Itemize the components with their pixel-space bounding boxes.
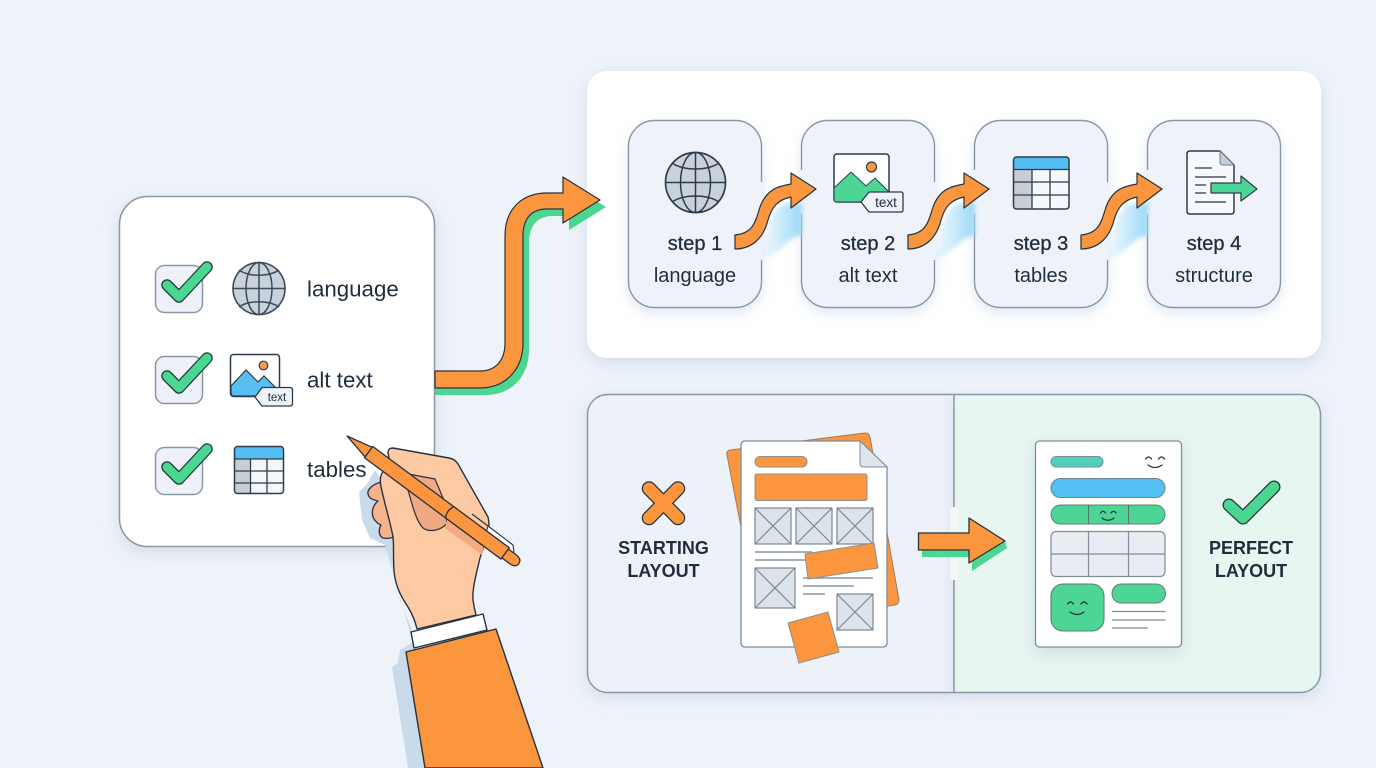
icon: globe (666, 152, 726, 212)
icon: green check (1229, 487, 1274, 518)
checkbox: alt text (156, 356, 207, 404)
label: perfect layout: PERFECT (1209, 538, 1293, 558)
step card 4 (1148, 120, 1280, 308)
icon: orange cross (649, 488, 678, 518)
pen (343, 430, 523, 569)
step card 3 (974, 120, 1108, 308)
sleeve (406, 629, 543, 768)
label: alt text: alt text (307, 368, 373, 392)
icon: image with alt text tag (834, 154, 903, 212)
text: alt text: alt text (839, 265, 898, 287)
arrow: step 3 to step 4 (1081, 170, 1162, 260)
text: structure: structure (1175, 265, 1253, 287)
pen shadow (445, 519, 484, 555)
text: language: language (654, 265, 736, 287)
text: step 1: step 1 (668, 233, 722, 255)
arrow: step 1 to step 2 (735, 170, 816, 260)
text: step 2: step 2 (841, 233, 895, 255)
label: perfect layout: LAYOUT (1215, 561, 1287, 581)
clip line over hand (472, 514, 488, 526)
label: starting layout: STARTING (618, 538, 709, 558)
label: language: language (307, 276, 399, 302)
cuff (411, 614, 487, 648)
icon: globe (233, 262, 285, 314)
step card 1 (628, 120, 762, 308)
palm and thumb (380, 448, 489, 629)
arrow: checklist to steps (435, 177, 606, 395)
panel: four steps (587, 71, 1321, 358)
icon: image with alt text tag: text (268, 392, 287, 404)
label: starting layout: LAYOUT (627, 561, 700, 581)
checkbox: language (156, 266, 207, 312)
illustration: tidy document (1036, 441, 1182, 647)
text: tables: tables (1014, 265, 1068, 287)
pen clip (484, 526, 514, 556)
hand shadow (359, 470, 430, 768)
icon: image with alt text tag (230, 354, 292, 406)
fingers (368, 482, 395, 538)
icon: document with arrow (1187, 151, 1257, 214)
illustration: hand writing with pen (343, 430, 543, 768)
label: perfect layout (1209, 538, 1293, 581)
icon: image with alt text tag: text (875, 195, 897, 210)
text: step 3: step 3 (1014, 233, 1068, 255)
arrow: starting to perfect layout (918, 518, 1007, 571)
icon: table (234, 446, 284, 494)
panel: before and after (588, 394, 1320, 692)
arrow: step 2 to step 3 (908, 170, 989, 260)
illustration: messy document (727, 433, 899, 663)
label: starting layout (618, 538, 709, 581)
palm shading (403, 473, 447, 530)
panel: checklist card (120, 196, 434, 546)
step card 2 (802, 120, 934, 308)
checkbox: tables (156, 448, 207, 494)
icon: table (1014, 157, 1069, 209)
text: step 4: step 4 (1187, 233, 1241, 255)
label: tables: tables (307, 457, 366, 482)
